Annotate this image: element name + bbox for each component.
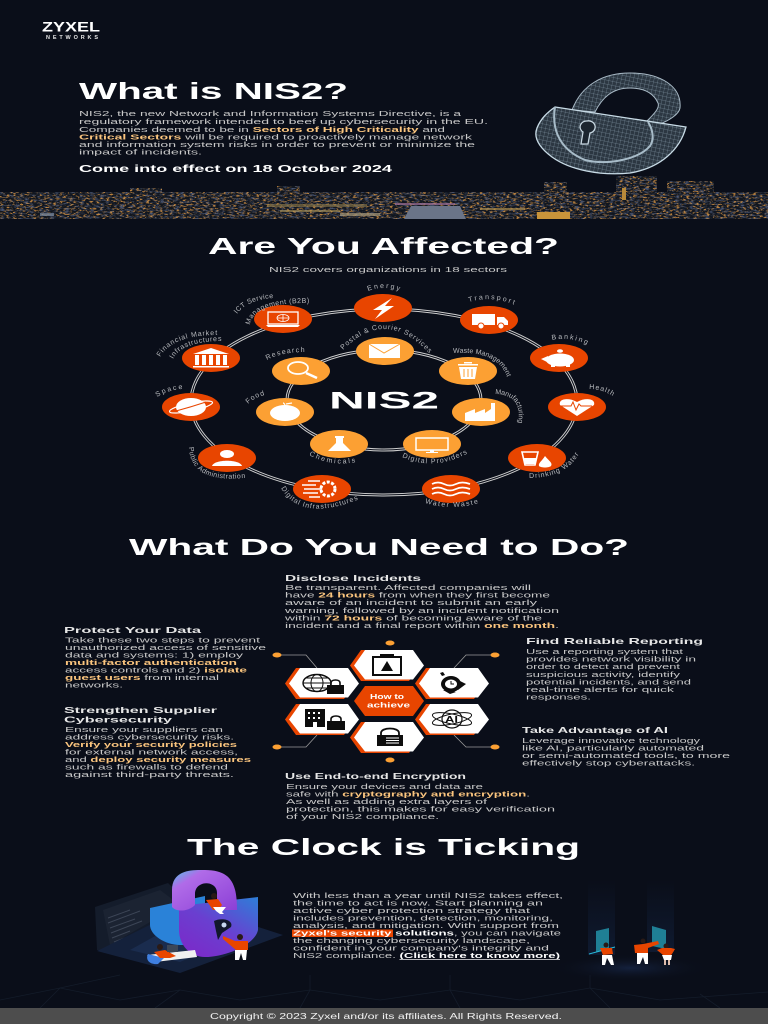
logo: Zyxel Networks bbox=[42, 18, 101, 41]
text block: NIS2 description: and information system risks in order to prevent or minimize the bbox=[79, 142, 475, 149]
icon: public administration bbox=[198, 444, 256, 472]
text block: take advantage of AI: or semi-automated tools, to more bbox=[522, 753, 730, 760]
text block: take advantage of AI: Leverage innovative technology bbox=[522, 738, 701, 745]
figure: person with pointer bbox=[600, 942, 614, 965]
text block: take advantage of AI: like AI, particularly automated bbox=[522, 746, 704, 752]
text block: clock is ticking body: Zyxel's security solutions , you can navigate bbox=[293, 930, 561, 938]
text block: protect your data: Protect Your Data bbox=[64, 625, 202, 635]
icon: financial market infrastructures bbox=[182, 344, 240, 372]
hexagon: upper right, clock rocket bbox=[415, 668, 489, 699]
chart: sector rings bbox=[156, 284, 614, 509]
icon: ICT service management bbox=[254, 305, 312, 333]
logo: Zyxel Networks: NETWORKS bbox=[46, 35, 98, 41]
icon: food bbox=[256, 398, 314, 426]
decorative network floor bbox=[0, 975, 768, 1008]
hexagon: centre, how to achieve: achieve bbox=[367, 700, 410, 710]
icon: water waste bbox=[422, 475, 480, 503]
sector labels: Research bbox=[265, 346, 304, 360]
text block: find reliable reporting: order to detect and prevent bbox=[526, 664, 680, 671]
figure: person on padlock bbox=[206, 893, 226, 914]
label: NIS2 centre: NIS2 bbox=[329, 388, 439, 414]
text block: find reliable reporting: potential incidents, and send bbox=[526, 680, 691, 686]
text block: protect your data: Take these two steps to prevent bbox=[65, 638, 260, 644]
text block: find reliable reporting bbox=[526, 636, 703, 702]
text block: protect your data: guest users from internal bbox=[65, 675, 220, 682]
text block: disclose incidents bbox=[283, 573, 559, 630]
text block: find reliable reporting: responses. bbox=[526, 694, 591, 702]
text block: strengthen supplier cybersecurity: Strengthen Supplier bbox=[64, 705, 218, 715]
panel: the clock is ticking bbox=[0, 834, 768, 1008]
panel: what is NIS2 bbox=[0, 18, 768, 219]
text block: disclose incidents: aware of an incident to submit an early bbox=[285, 600, 538, 607]
sector labels: Drinking Water bbox=[530, 452, 578, 478]
text block: NIS2 description bbox=[79, 111, 488, 156]
text block: strengthen supplier cybersecurity: Verify your security policies bbox=[65, 742, 237, 749]
heading: What is NIS2?: What is NIS2? bbox=[79, 78, 348, 104]
text block: strengthen supplier cybersecurity: address cybersecurity risks. bbox=[65, 734, 234, 742]
image: night city skyline bbox=[0, 172, 768, 219]
sector labels: Water Waste bbox=[426, 498, 478, 507]
text block: strengthen supplier cybersecurity: Ensure your suppliers can bbox=[65, 727, 223, 734]
sector labels: Energy bbox=[367, 284, 400, 292]
sector labels: Transport bbox=[468, 295, 516, 304]
sector labels: Chemicals bbox=[310, 452, 355, 464]
text block: end-to-end encryption bbox=[285, 771, 555, 821]
hexagon: centre, how to achieve bbox=[354, 686, 424, 716]
text block: find reliable reporting: real-time alerts for quick bbox=[526, 687, 675, 694]
subheading: 18 sectors: NIS2 covers organizations in 18 sectors bbox=[269, 267, 508, 274]
text block: find reliable reporting: suspicious activity, identify bbox=[526, 672, 681, 679]
hexagon: lower right, AI atom bbox=[415, 704, 489, 735]
text block: take advantage of AI bbox=[522, 725, 730, 768]
figure: person pointing bbox=[634, 938, 659, 964]
text block: protect your data bbox=[64, 625, 266, 690]
text block: NIS2 description: impact of incidents. bbox=[79, 150, 202, 156]
sector labels: Manufacturing bbox=[496, 389, 524, 423]
heading: The Clock is Ticking: The Clock is Ticking bbox=[187, 834, 580, 860]
text block: strengthen supplier cybersecurity: and deploy security measures bbox=[65, 757, 251, 764]
icon: postal and courier services bbox=[356, 337, 414, 365]
sector labels: Space bbox=[156, 385, 182, 396]
sector labels bbox=[156, 284, 614, 509]
footer: copyright bbox=[0, 1008, 768, 1024]
image: wireframe padlock bbox=[536, 73, 686, 174]
text block: clock is ticking body: With less than a year until NIS2 takes effect, bbox=[293, 893, 563, 900]
diagram: how to achieve hexagons bbox=[272, 640, 500, 762]
heading: Are You Affected?: Are You Affected? bbox=[208, 233, 559, 259]
text block: end-to-end encryption: safe with cryptography and encryption . bbox=[286, 792, 530, 798]
text block: clock is ticking body: the changing cybersecurity landscape, bbox=[293, 938, 530, 945]
text block: protect your data: data and systems: 1) employ bbox=[65, 652, 244, 660]
hexagon: top, incident report bbox=[350, 650, 424, 681]
text block: disclose incidents: have 24 hours from when they first become bbox=[285, 592, 550, 600]
text block: strengthen supplier cybersecurity: such as firewalls to defend bbox=[65, 764, 228, 772]
illustration: purple padlock on laptop bbox=[95, 870, 283, 973]
logo: Zyxel Networks: ZYXEL bbox=[42, 18, 101, 34]
text block: clock is ticking body: includes prevention, detection, monitoring, bbox=[293, 916, 553, 922]
icon: drinking water bbox=[508, 444, 566, 472]
sector labels: Postal & Courier Services bbox=[340, 324, 432, 353]
hexagon: centre, how to achieve: How to bbox=[370, 692, 405, 701]
text block: strengthen supplier cybersecurity: for external network access, bbox=[65, 750, 238, 756]
figure: person with long hair bbox=[657, 944, 675, 965]
hexagon: lower left, building lock bbox=[285, 704, 359, 735]
icon: energy bbox=[354, 294, 412, 322]
text block: clock is ticking body bbox=[292, 893, 563, 960]
icon: digital providers bbox=[403, 430, 461, 458]
text block: end-to-end encryption: of your NIS2 compliance. bbox=[286, 814, 439, 821]
text block: disclose incidents: Be transparent. Affected companies will bbox=[285, 585, 532, 592]
text block: clock is ticking body: NIS2 compliance. (Click here to know more) bbox=[293, 953, 560, 960]
icon: banking bbox=[530, 344, 588, 372]
text block: take advantage of AI: Take Advantage of AI bbox=[522, 725, 668, 735]
icon: research bbox=[272, 357, 330, 385]
text block: end-to-end encryption: protection, this makes for easy verification bbox=[286, 806, 555, 814]
panel: what do you need to do bbox=[64, 534, 730, 821]
text block: find reliable reporting: provides network visibility in bbox=[526, 656, 696, 664]
text block: end-to-end encryption: Use End-to-end Encryption bbox=[285, 771, 466, 781]
illustration: people at data pillars bbox=[550, 880, 710, 982]
icon: chemicals bbox=[310, 430, 368, 458]
sector labels: ICT Service bbox=[234, 294, 273, 314]
text block: protect your data: multi-factor authentication bbox=[65, 660, 237, 667]
sector labels: Public Administration bbox=[189, 447, 245, 479]
text block: clock is ticking body: active cyber protection strategy that bbox=[293, 908, 530, 915]
callout: effective date: Come into effect on 18 October 2024 bbox=[79, 163, 392, 175]
text block: NIS2 description: NIS2, the new Network and Information Systems Directive, is a bbox=[79, 111, 461, 118]
icon: manufacturing bbox=[452, 398, 510, 426]
figure: person at desk bbox=[147, 944, 197, 964]
text block: protect your data: networks. bbox=[65, 682, 123, 690]
heading: What Do You Need to Do?: What Do You Need to Do? bbox=[129, 534, 629, 560]
text block: find reliable reporting: Use a reporting system that bbox=[526, 649, 683, 656]
footer: copyright: Copyright © 2023 Zyxel and/or its affiliates. All Rights Reserved. bbox=[210, 1012, 562, 1021]
hexagon: upper left, globe lock bbox=[285, 668, 359, 699]
text block: strengthen supplier cybersecurity: Cybersecurity bbox=[64, 714, 173, 724]
hexagon: lower right, AI atom: AI bbox=[445, 714, 458, 724]
text block: protect your data: unauthorized access of sensitive bbox=[65, 645, 266, 652]
text block: take advantage of AI: effectively stop cyberattacks. bbox=[522, 760, 695, 768]
icon: health bbox=[548, 393, 606, 421]
sector labels: Banking bbox=[552, 334, 588, 346]
text block: end-to-end encryption: As well as adding extra layers of bbox=[286, 799, 487, 806]
text block: disclose incidents: Disclose Incidents bbox=[285, 573, 421, 583]
text block: strengthen supplier cybersecurity: against third-party threats. bbox=[65, 772, 234, 779]
sector labels: Financial Market bbox=[156, 330, 218, 356]
text block: protect your data: access controls and 2) isolate bbox=[65, 668, 247, 674]
sector labels: Waste Management bbox=[453, 348, 511, 377]
text block: clock is ticking body: confident in your company's integrity and bbox=[293, 946, 549, 952]
text block: NIS2 description: Companies deemed to be in Sectors of High Criticality and bbox=[79, 127, 445, 134]
icon: waste management bbox=[439, 357, 497, 385]
sector labels: Management (B2B) bbox=[245, 298, 309, 324]
sector labels: Health bbox=[590, 384, 614, 396]
sector labels: Food bbox=[245, 390, 264, 404]
sector labels: Infrastructures bbox=[169, 337, 222, 358]
panel: are you affected bbox=[156, 233, 614, 509]
text block: find reliable reporting: Find Reliable Reporting bbox=[526, 636, 703, 646]
text block: strengthen supplier cybersecurity bbox=[64, 705, 251, 779]
icon: space bbox=[162, 393, 220, 421]
text block: disclose incidents: within 72 hours of becoming aware of the bbox=[283, 616, 542, 622]
text block: clock is ticking body: analysis, and mitigation. With support from bbox=[293, 923, 559, 930]
figure: person standing bbox=[223, 934, 248, 960]
text block: disclose incidents: warning, followed by an incident notification bbox=[283, 608, 559, 615]
sector labels: Digital Infrastructures bbox=[281, 486, 358, 509]
sector labels: Digital Providers bbox=[402, 450, 467, 464]
hexagon: bottom, padlock bbox=[350, 722, 424, 753]
text block: clock is ticking body: the time to act is now. Start planning an bbox=[293, 900, 543, 908]
text block: NIS2 description: regulatory framework intended to beef up cybersecurity in the EU. bbox=[79, 119, 488, 126]
icon: transport bbox=[460, 306, 518, 334]
text block: NIS2 description: Critical Sectors will be required to proactively manage network bbox=[79, 134, 473, 142]
text block: disclose incidents: incident and a final report within one month . bbox=[285, 623, 559, 630]
icon: digital infrastructures bbox=[293, 475, 351, 503]
text block: end-to-end encryption: Ensure your devices and data are bbox=[286, 784, 483, 791]
